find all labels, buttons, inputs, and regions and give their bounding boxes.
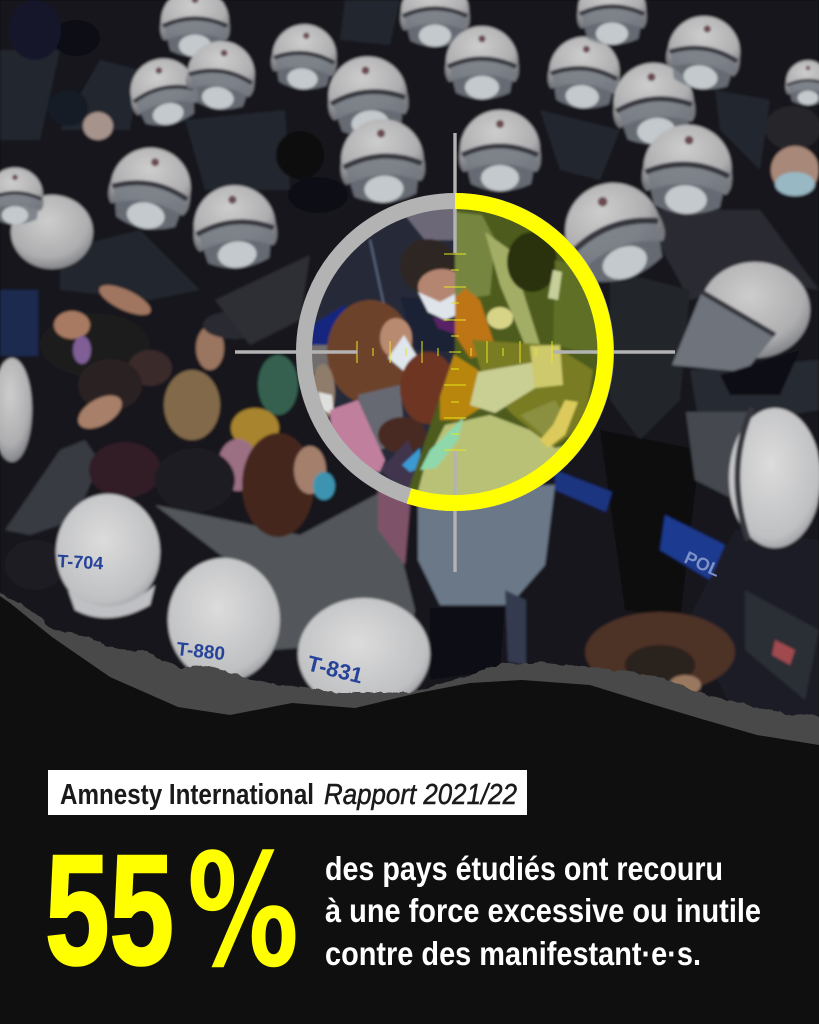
police vests: [0, 0, 819, 440]
police helmets: [0, 0, 819, 462]
helmet numbers: T-704: [57, 551, 104, 573]
helmet numbers: T-880: [175, 639, 226, 665]
statistic: 55%: [45, 820, 299, 1002]
riot shields and police sign: [505, 430, 725, 665]
statement text: des pays étudiés ont recouru: [325, 850, 723, 887]
police body, right: [688, 530, 819, 720]
curly-haired person at bottom: [585, 612, 735, 695]
large helmet on the right: [672, 262, 810, 395]
statement text: à une force excessive ou inutile: [325, 892, 761, 929]
report label: Amnesty International: [60, 779, 314, 811]
numbered front helmets: [56, 494, 430, 710]
scope ring: [304, 201, 606, 503]
untinted left side of the magnified photo: [312, 209, 458, 488]
statement text: [325, 850, 761, 972]
reticle ticks: [357, 254, 552, 450]
helmet with raised visor at far right: [686, 408, 819, 548]
yellow-tinted right side of the magnified photo: [408, 209, 598, 495]
scope: magnified area: [312, 209, 598, 495]
statement text: contre des manifestant·e·s.: [325, 935, 701, 972]
report label: Rapport 2021/22: [324, 779, 517, 811]
statistic: 55%: 55: [45, 823, 174, 998]
helmet numbers: T-831: [305, 651, 365, 688]
torn paper edge: [0, 590, 819, 770]
protesters left of the scope: [0, 255, 310, 590]
black text panel: [0, 592, 819, 1024]
statistic: 55%: %: [187, 820, 299, 1002]
report label: [48, 770, 527, 815]
protester in grey coat: [155, 433, 415, 650]
protester in blue-grey jacket: [418, 485, 555, 605]
dark caps and faces: [9, 0, 819, 213]
crosshair lines: [235, 133, 675, 572]
helmet numbers: [57, 551, 365, 688]
police sign text: POL: [681, 547, 723, 581]
background photo: riot police surrounding protesters: [0, 0, 819, 720]
